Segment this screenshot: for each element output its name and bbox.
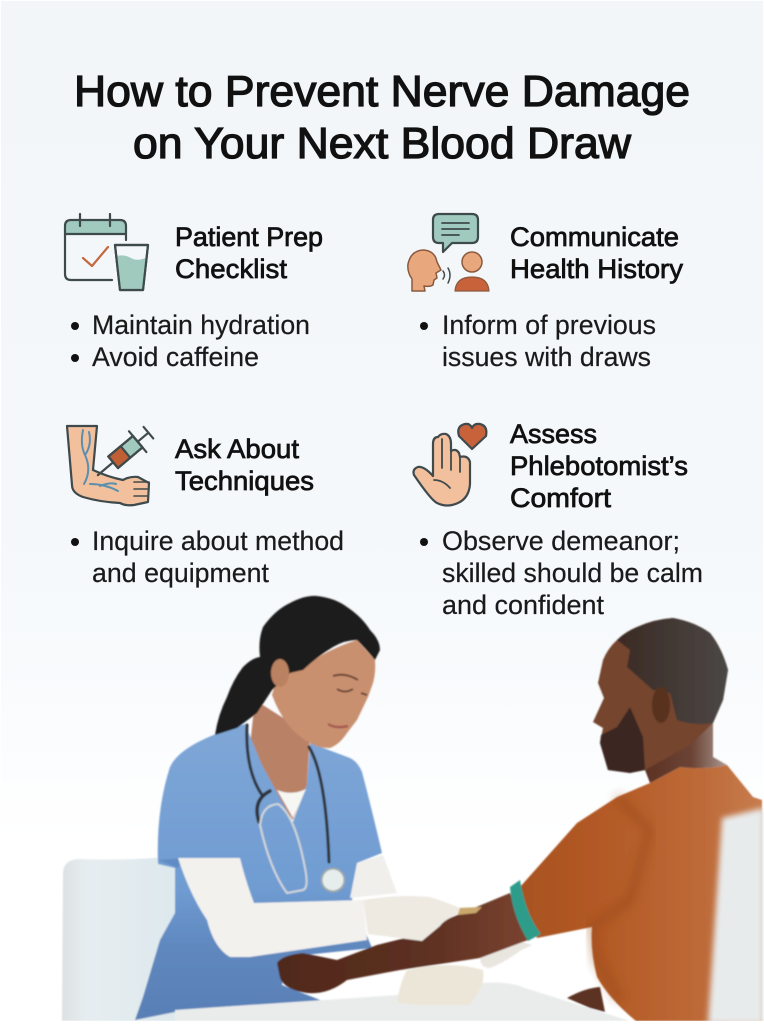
- white undersleeve near arm: [178, 858, 367, 957]
- heading: [510, 222, 684, 284]
- bullet list: [71, 310, 310, 372]
- panel: ask about techniques: [67, 422, 344, 588]
- bullet list: Avoid caffeine: [92, 342, 259, 372]
- heading: Assess: [510, 419, 597, 449]
- heading: [175, 434, 314, 496]
- photo: nurse drawing blood from patient: [62, 596, 764, 1024]
- heading: Comfort: [510, 483, 612, 513]
- panel: assess phlebotomist's comfort: [414, 419, 703, 620]
- icon: speaking head and listener: [408, 214, 489, 291]
- patient head: [593, 618, 728, 773]
- patient shirt: [520, 765, 762, 1021]
- heading: Ask About: [175, 434, 300, 464]
- heading: [175, 222, 323, 284]
- patient beard: [600, 707, 645, 773]
- title: [74, 67, 690, 168]
- patient glove under arm: [480, 938, 532, 968]
- heading: Techniques: [175, 466, 314, 496]
- nurse hair and ponytail: [215, 596, 380, 735]
- nurse face: [272, 640, 375, 748]
- nurse ear: [271, 659, 289, 687]
- title: How to Prevent Nerve Damage: [74, 67, 690, 116]
- tourniquet: [510, 880, 541, 941]
- patient neck: [640, 720, 727, 783]
- white undersleeve far arm: [350, 855, 397, 898]
- bullet list: issues with draws: [442, 342, 651, 372]
- bullet list: Observe demeanor;: [442, 526, 680, 556]
- patient ear: [652, 687, 670, 723]
- panel: patient prep checklist: [65, 214, 323, 372]
- patient lower arm: [567, 987, 605, 1012]
- patient hair: [617, 618, 728, 724]
- bullet list: and confident: [442, 590, 605, 620]
- heading: Checklist: [175, 254, 288, 284]
- bullet list: and equipment: [92, 558, 270, 588]
- vial: [458, 907, 482, 915]
- blurred foreground chair: [708, 808, 764, 1024]
- chair behind nurse: [62, 856, 180, 1021]
- heading: Communicate: [510, 222, 679, 252]
- stethoscope: [247, 725, 344, 893]
- bullet list: skilled should be calm: [442, 558, 703, 588]
- icon: raised hand with heart: [414, 424, 486, 506]
- heading: [510, 419, 688, 513]
- nurse scrubs: [135, 724, 382, 1020]
- panel: communicate health history: [408, 214, 684, 372]
- bullet list: Maintain hydration: [92, 310, 310, 340]
- bullet list: [420, 310, 656, 372]
- heading: Phlebotomist’s: [510, 451, 688, 481]
- title: on Your Next Blood Draw: [133, 119, 631, 168]
- icon: calendar and water glass: [65, 214, 148, 290]
- shirt sleeve shadow: [592, 797, 650, 1000]
- icon: arm with syringe: [67, 422, 157, 505]
- bullet list: [420, 526, 703, 620]
- arm cushion: [397, 965, 483, 1005]
- bullet list: [71, 526, 344, 588]
- patient arm and hand: [277, 893, 528, 993]
- nurse glove: [363, 896, 460, 941]
- nurse neck: [250, 700, 310, 820]
- nurse sleeve fold: [158, 858, 184, 868]
- bullet list: Inquire about method: [92, 526, 344, 556]
- nurse undershirt: [277, 789, 306, 818]
- bullet list: Inform of previous: [442, 310, 656, 340]
- heading: Health History: [510, 254, 684, 284]
- heading: Patient Prep: [175, 222, 323, 252]
- table: [175, 983, 630, 1021]
